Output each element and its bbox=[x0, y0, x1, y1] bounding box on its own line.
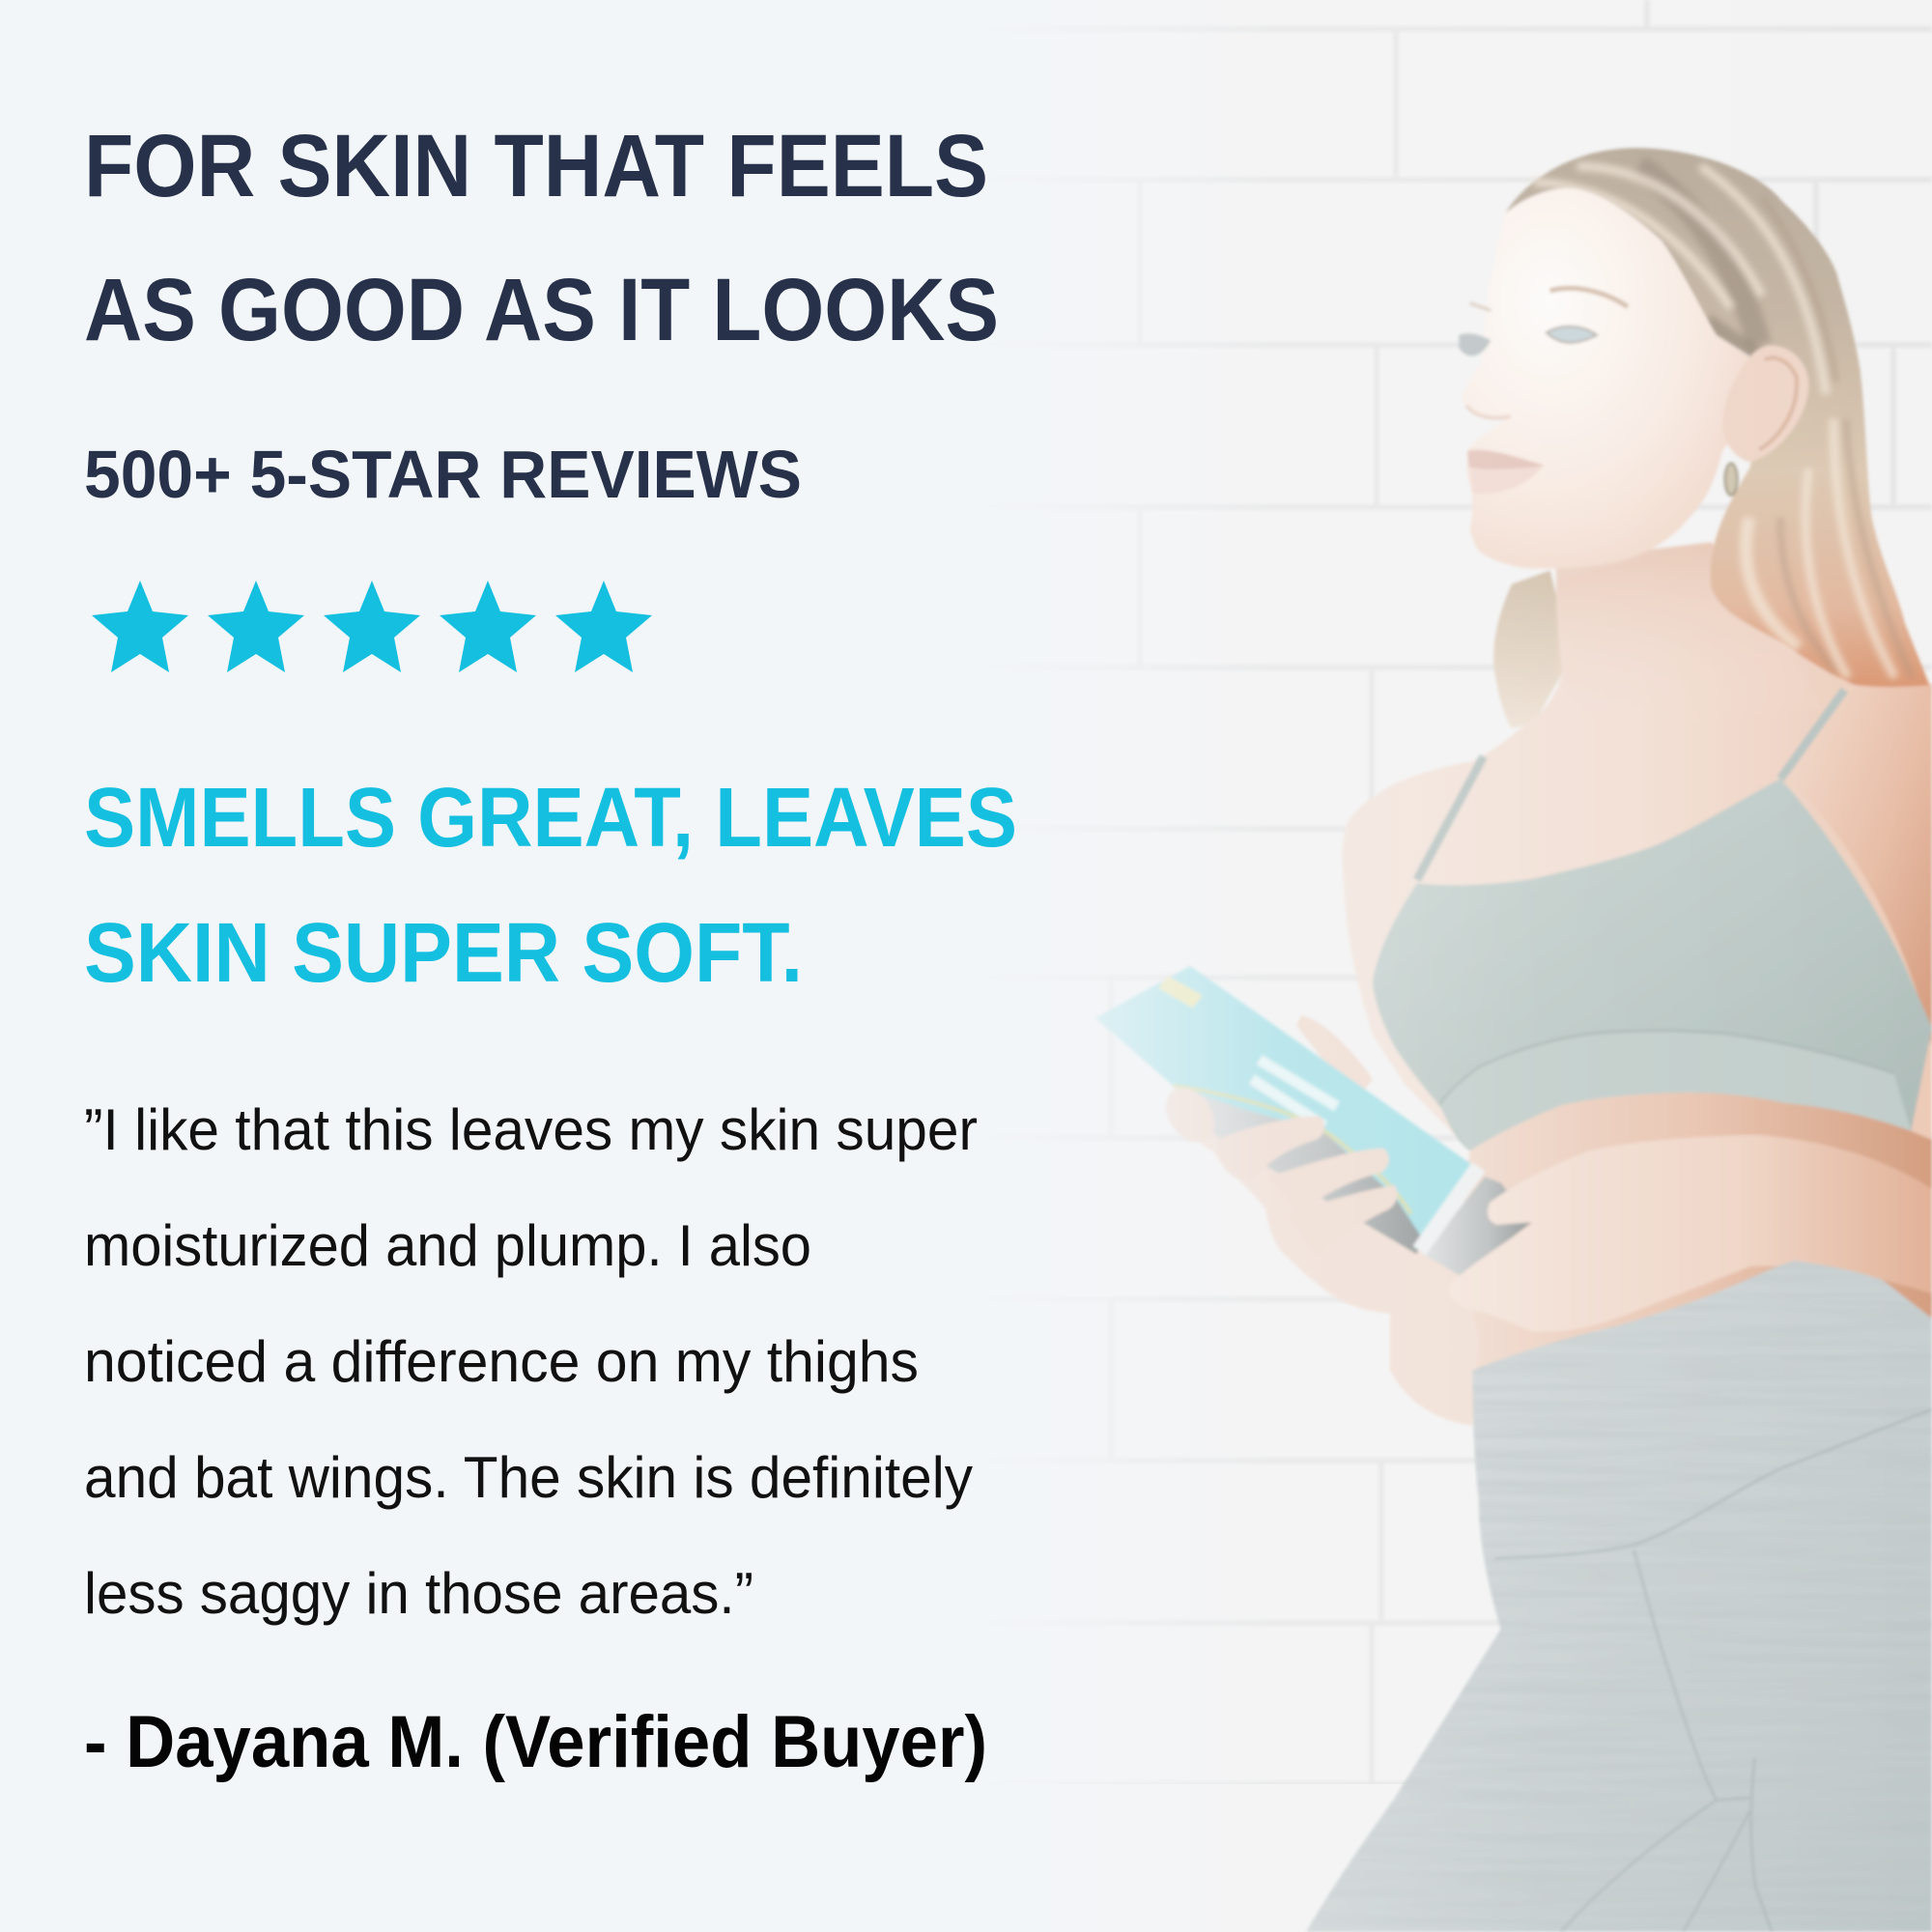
review headline line 2: SKIN SUPER SOFT. bbox=[84, 906, 803, 1000]
star 1 bbox=[92, 581, 188, 672]
eyebrow bbox=[1550, 288, 1628, 307]
heading line 1: FOR SKIN THAT FEELS bbox=[84, 117, 988, 215]
quote line 1: ”I like that this leaves my skin super bbox=[84, 1097, 978, 1162]
brick wall background bbox=[773, 0, 1932, 1932]
face bbox=[1459, 188, 1808, 569]
star 5 bbox=[555, 581, 652, 672]
quote line 2: moisturized and plump. I also bbox=[84, 1213, 811, 1278]
reviewer attribution: - Dayana M. (Verified Buyer) bbox=[84, 1701, 987, 1783]
hair behind neck bbox=[1493, 571, 1562, 728]
star 4 bbox=[440, 581, 536, 672]
five star rating bbox=[92, 581, 652, 672]
model figure bbox=[1095, 148, 1932, 1932]
bra band bbox=[1439, 1031, 1911, 1151]
heading line 2: AS GOOD AS IT LOOKS bbox=[84, 261, 999, 359]
neck shade bbox=[1556, 542, 1824, 727]
review headline line 1: SMELLS GREAT, LEAVES bbox=[84, 771, 1017, 865]
lips bbox=[1467, 450, 1545, 469]
product tube bbox=[1095, 966, 1531, 1276]
ear bbox=[1722, 345, 1808, 462]
eyes bbox=[1547, 327, 1597, 343]
fingers gripping tube bbox=[1156, 1079, 1397, 1257]
photo: brick wall and model bbox=[1096, 0, 1932, 1932]
review quote bbox=[84, 1097, 978, 1626]
hair bbox=[1506, 148, 1929, 687]
star 2 bbox=[208, 581, 304, 672]
heading bbox=[84, 117, 999, 359]
quote line 5: less saggy in those areas.” bbox=[84, 1561, 753, 1626]
star 3 bbox=[324, 581, 420, 672]
review headline bbox=[84, 771, 1017, 1000]
nose shadow bbox=[1466, 406, 1511, 418]
shoulders, neck and chest skin bbox=[1342, 542, 1932, 1151]
sports bra bbox=[1373, 690, 1932, 1151]
earring bbox=[1725, 464, 1737, 496]
left arm and hand bbox=[1173, 1015, 1479, 1426]
quote line 4: and bat wings. The skin is definitely bbox=[84, 1445, 973, 1510]
leggings bbox=[1306, 1257, 1932, 1932]
right arm bbox=[1789, 684, 1932, 1047]
right hand and forearm bbox=[1449, 1135, 1932, 1332]
subheading: review count: 500+ 5-STAR REVIEWS bbox=[84, 437, 802, 512]
quote line 3: noticed a difference on my thighs bbox=[84, 1329, 919, 1394]
midriff skin bbox=[1454, 1093, 1932, 1374]
